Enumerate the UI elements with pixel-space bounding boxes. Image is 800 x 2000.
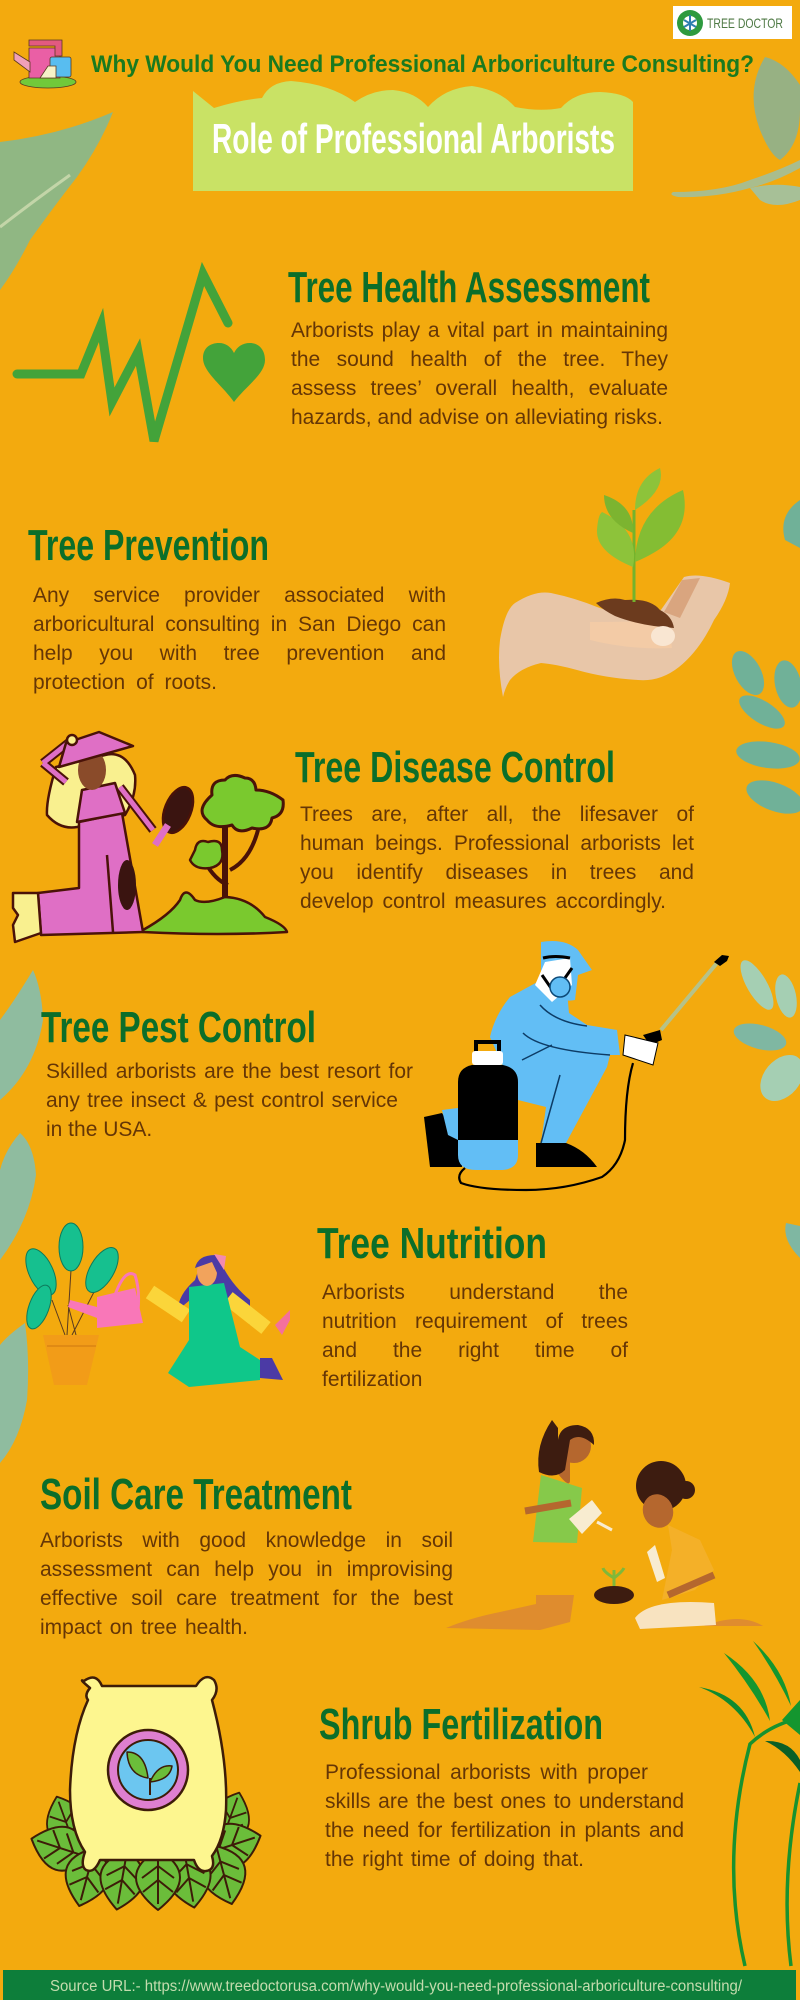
text: tree nutrition: fertilization bbox=[322, 1368, 422, 1391]
text: tree health assessment: the sound health of the tree. They bbox=[291, 348, 668, 371]
text: tree prevention: arboricultural consulting in San Diego can bbox=[33, 613, 446, 636]
illustration: woman in green overalls bbox=[150, 1254, 290, 1387]
illustration: woman gardener with shovel and tree bbox=[13, 732, 287, 942]
text: tree disease control: human beings. Professional arborists let bbox=[300, 832, 694, 855]
text: soil care treatment bbox=[40, 1529, 453, 1639]
text: tree pest control: in the USA. bbox=[46, 1118, 152, 1141]
text: tree nutrition: and the right time of bbox=[322, 1339, 628, 1362]
heading: shrub fertilization: Shrub Fertilization bbox=[319, 1700, 603, 1749]
leaves: right side upper branch bbox=[725, 500, 800, 820]
banner: role of professional arborists bbox=[193, 81, 633, 191]
heading: tree health assessment: Tree Health Assessment bbox=[288, 263, 650, 312]
text: tree disease control: you identify diseases in trees and bbox=[300, 861, 694, 884]
text: tree health assessment: hazards, and advise on alleviating risks. bbox=[291, 406, 663, 429]
text: soil care treatment: impact on tree health. bbox=[40, 1616, 248, 1639]
icon: garden watering set bbox=[14, 40, 76, 88]
text: shrub fertilization: the need for fertilization in plants and bbox=[325, 1819, 684, 1842]
leaf: top left bbox=[0, 112, 113, 290]
heading: tree prevention: Tree Prevention bbox=[28, 521, 269, 570]
text: tree health assessment: Arborists play a vital part in maintaining bbox=[291, 319, 668, 342]
text: shrub fertilization bbox=[325, 1761, 684, 1871]
text: tree disease control bbox=[300, 803, 694, 913]
text: tree prevention: protection of roots. bbox=[33, 671, 217, 694]
text: soil care treatment: Arborists with good knowledge in soil bbox=[40, 1529, 453, 1552]
page title: Why Would You Need Professional Arboriculture Consulting? bbox=[91, 51, 754, 78]
heading: tree disease control: Tree Disease Control bbox=[295, 743, 615, 792]
text: tree pest control: any tree insect & pest control service bbox=[46, 1089, 398, 1112]
illustration: hand holding seedling bbox=[499, 468, 730, 697]
illustration: pest control worker with sprayer bbox=[424, 941, 729, 1190]
leaves: left edge bbox=[0, 970, 43, 1463]
illustration: fertilizer bag with leaves bbox=[25, 1677, 267, 1913]
logo bbox=[673, 6, 792, 39]
text: tree health assessment: assess trees’ overall health, evaluate bbox=[291, 377, 668, 400]
text: shrub fertilization: the right time of doing that. bbox=[325, 1848, 584, 1871]
text: tree nutrition bbox=[322, 1281, 628, 1391]
leaves: right side pest branch bbox=[731, 956, 800, 1258]
text: tree nutrition: Arborists understand the bbox=[322, 1281, 628, 1304]
footer bar bbox=[3, 1970, 796, 2000]
text: shrub fertilization: Professional arborists with proper bbox=[325, 1761, 648, 1784]
illustration: two kids planting a seedling bbox=[446, 1420, 763, 1630]
heading: tree nutrition: Tree Nutrition bbox=[317, 1219, 547, 1268]
text: tree pest control bbox=[46, 1060, 413, 1141]
text: soil care treatment: assessment can help you in improvising bbox=[40, 1558, 453, 1581]
heading: soil care treatment: Soil Care Treatment bbox=[40, 1470, 352, 1519]
illustration: palm fronds bottom right bbox=[699, 1641, 800, 1966]
leaves: top right branch bbox=[671, 57, 800, 205]
icon: heart bbox=[203, 343, 265, 402]
heading: tree pest control: Tree Pest Control bbox=[41, 1003, 316, 1052]
text: tree disease control: develop control measures accordingly. bbox=[300, 890, 666, 913]
text: tree nutrition: nutrition requirement of trees bbox=[322, 1310, 628, 1333]
text: tree pest control: Skilled arborists are the best resort for bbox=[46, 1060, 413, 1083]
icon: heartbeat line bbox=[17, 274, 228, 441]
text: tree prevention: Any service provider associated with bbox=[33, 584, 446, 607]
banner: role of professional arborists: Role of Professional Arborists bbox=[212, 115, 615, 162]
text: tree prevention bbox=[33, 584, 446, 694]
text: shrub fertilization: skills are the best ones to understand bbox=[325, 1790, 684, 1813]
text: soil care treatment: effective soil care treatment for the best bbox=[40, 1587, 453, 1610]
illustration: potted plant with watering can bbox=[20, 1223, 143, 1385]
text: tree prevention: help you with tree prevention and bbox=[33, 642, 446, 665]
text: tree disease control: Trees are, after all, the lifesaver of bbox=[300, 803, 694, 826]
text: tree health assessment bbox=[291, 319, 668, 429]
footer bar: Source URL:- https://www.treedoctorusa.com/why-would-you-need-professional-arboriculture-consulting/ bbox=[50, 1978, 743, 1995]
